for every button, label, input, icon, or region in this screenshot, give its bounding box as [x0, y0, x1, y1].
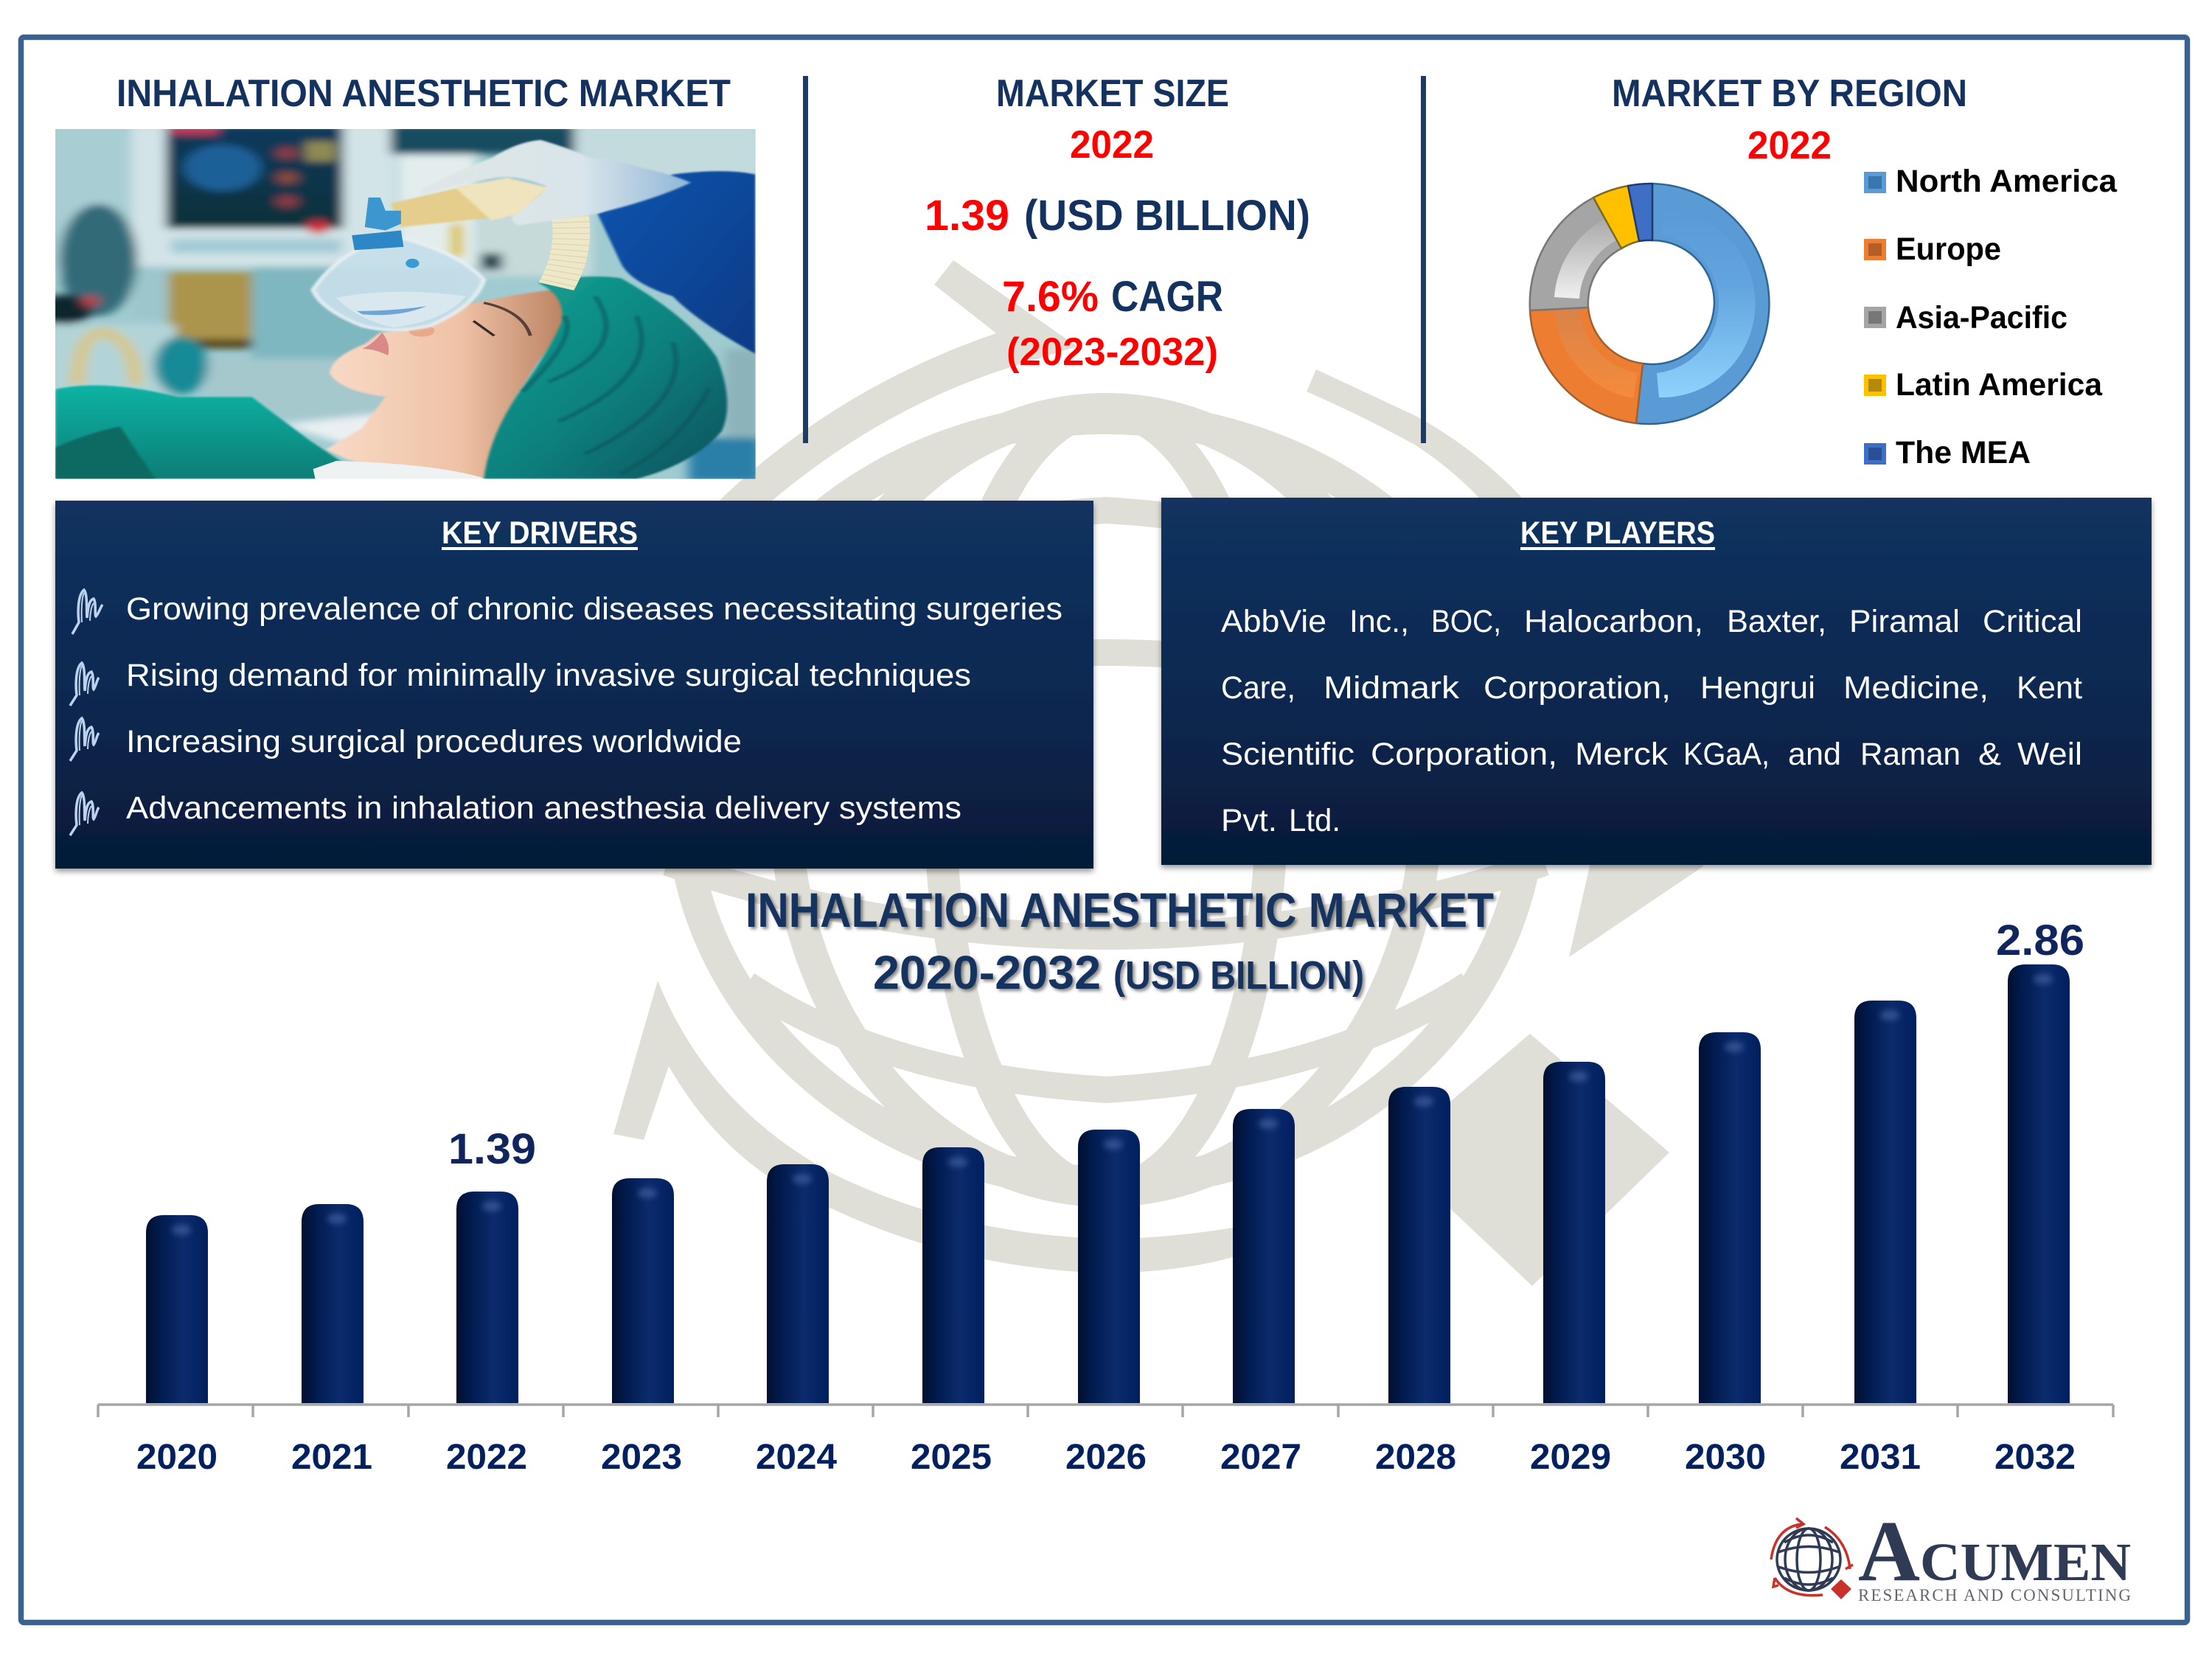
key players list: Corporation,: [1484, 670, 1671, 706]
key players list: Weil: [2017, 737, 2082, 772]
legend: the mea: The MEA: [1896, 435, 2031, 470]
key players list: Kent: [2017, 670, 2082, 706]
bar 2027: [1233, 1109, 1295, 1403]
key players list: Hengrui: [1700, 670, 1815, 706]
donut chart: [1530, 184, 1769, 424]
key players list: Inc.,: [1349, 604, 1409, 639]
key players list: and: [1788, 737, 1841, 772]
key players list: Critical: [1983, 604, 2082, 639]
panel: key drivers: [55, 501, 1093, 869]
logo wordmark: CUMEN: [1920, 1532, 2131, 1592]
divider right: [1421, 76, 1426, 443]
heading: market by region: MARKET BY REGION: [1612, 72, 1967, 115]
bar 2023: [612, 1178, 674, 1403]
x axis: [98, 1405, 2113, 1417]
bar 2028: [1388, 1087, 1450, 1403]
legend: latin america: Latin America: [1896, 367, 2103, 403]
skin: [326, 288, 569, 479]
year labels: 2032: [1994, 1438, 2076, 1477]
value label 2.86: 2.86: [1996, 917, 2084, 964]
logo: acumen research and consulting: [1771, 1503, 2131, 1604]
market value: (USD BILLION): [1024, 192, 1310, 240]
cagr: 7.6%: [1002, 273, 1099, 321]
heading: market size: MARKET SIZE: [996, 72, 1229, 115]
bar 2031: [1854, 1001, 1916, 1403]
value label 1.39: 1.39: [448, 1125, 536, 1173]
bar 2030: [1699, 1032, 1761, 1403]
chart title: [745, 883, 1494, 999]
mask: [313, 237, 484, 330]
driver text 1: Growing prevalence of chronic diseases necessitating surgeries: [126, 591, 1062, 627]
cap: [484, 276, 727, 479]
year 2022: 2022: [1070, 123, 1154, 167]
year labels: 2026: [1065, 1438, 1147, 1477]
cagr: CAGR: [1111, 273, 1223, 321]
key players list: Raman: [1860, 737, 1961, 772]
year labels: 2025: [911, 1438, 992, 1477]
chart title: (USD BILLION): [1113, 953, 1364, 998]
year labels: 2024: [756, 1438, 837, 1477]
heading: key players: KEY PLAYERS: [1520, 515, 1715, 551]
market value: 1.39: [925, 192, 1009, 240]
key players list: Pvt.: [1221, 803, 1277, 838]
divider left: [803, 76, 808, 443]
icon: driver bullet 1: [72, 590, 102, 634]
blue sleeve: [598, 171, 756, 354]
bar 2029: [1543, 1062, 1605, 1403]
key players list: [1221, 604, 2082, 838]
year labels: 2030: [1685, 1438, 1766, 1477]
chart title: INHALATION ANESTHETIC MARKET: [745, 883, 1494, 937]
panel: market size: [925, 72, 1310, 374]
key players list: BOC,: [1431, 604, 1501, 639]
key players list: Halocarbon,: [1524, 604, 1703, 639]
key players list: Midmark: [1324, 670, 1460, 706]
key players list: AbbVie: [1221, 604, 1326, 639]
icon: logo globe: [1771, 1518, 1853, 1599]
legend: [1864, 164, 2118, 470]
driver text 2: Rising demand for minimally invasive surgical techniques: [126, 658, 971, 693]
year labels: 2027: [1220, 1438, 1301, 1477]
key players list: Ltd.: [1289, 803, 1340, 838]
key players list: KGaA,: [1683, 737, 1770, 772]
icon: driver bullet 2: [70, 663, 99, 706]
watermark: large globe logo: [613, 260, 1703, 1286]
year labels: 2022: [446, 1438, 527, 1477]
chart title: 2020-2032: [873, 946, 1101, 999]
bar 2025: [922, 1147, 984, 1403]
logo tagline: RESEARCH AND CONSULTING: [1858, 1586, 2131, 1604]
key players list: Corporation,: [1371, 737, 1557, 772]
icon: driver bullet 3: [70, 718, 99, 761]
year labels: 2023: [601, 1438, 682, 1477]
key players list: Piramal: [1849, 604, 1960, 639]
legend: europe: Europe: [1896, 232, 2001, 267]
driver text 3: Increasing surgical procedures worldwide: [126, 724, 742, 759]
gown: [55, 386, 357, 479]
year 2022 region: 2022: [1747, 124, 1832, 167]
bar 2032: [2008, 964, 2070, 1403]
key players list: Merck: [1575, 737, 1669, 772]
bar 2022: [456, 1192, 518, 1403]
legend: north america: North America: [1896, 164, 2118, 199]
bar chart: [98, 917, 2113, 1477]
glove: [472, 139, 692, 226]
icon: driver bullet 4: [70, 793, 99, 835]
logo wordmark: A: [1858, 1503, 1920, 1599]
bar 2024: [767, 1164, 829, 1403]
connector: [391, 186, 497, 227]
year labels: 2028: [1375, 1438, 1456, 1477]
photo: patient with anesthesia mask: [36, 125, 761, 482]
key players list: &: [1978, 737, 2001, 772]
year labels: 2031: [1840, 1438, 1921, 1477]
key players list: Baxter,: [1727, 604, 1826, 639]
year labels: [136, 1438, 2076, 1477]
panel: market by region: [1530, 72, 2118, 470]
driver text 4: Advancements in inhalation anesthesia delivery systems: [126, 790, 961, 826]
cagr period: (2023-2032): [1006, 330, 1218, 374]
key players list: Scientific: [1221, 737, 1354, 772]
key players list: Medicine,: [1843, 670, 1989, 706]
year labels: 2029: [1530, 1438, 1611, 1477]
bar 2021: [302, 1204, 364, 1403]
corrugated tube: [556, 211, 571, 286]
key players list: Care,: [1221, 670, 1295, 706]
heading: key drivers: KEY DRIVERS: [442, 515, 638, 551]
bar 2020: [146, 1215, 208, 1403]
year labels: 2021: [291, 1438, 372, 1477]
title: inhalation anesthetic market: INHALATION ANESTHETIC MARKET: [116, 72, 731, 115]
panel: key players: [1161, 498, 2152, 865]
legend: asia-pacific: Asia-Pacific: [1896, 300, 2067, 335]
bar 2026: [1078, 1130, 1140, 1403]
year labels: 2020: [136, 1438, 218, 1477]
